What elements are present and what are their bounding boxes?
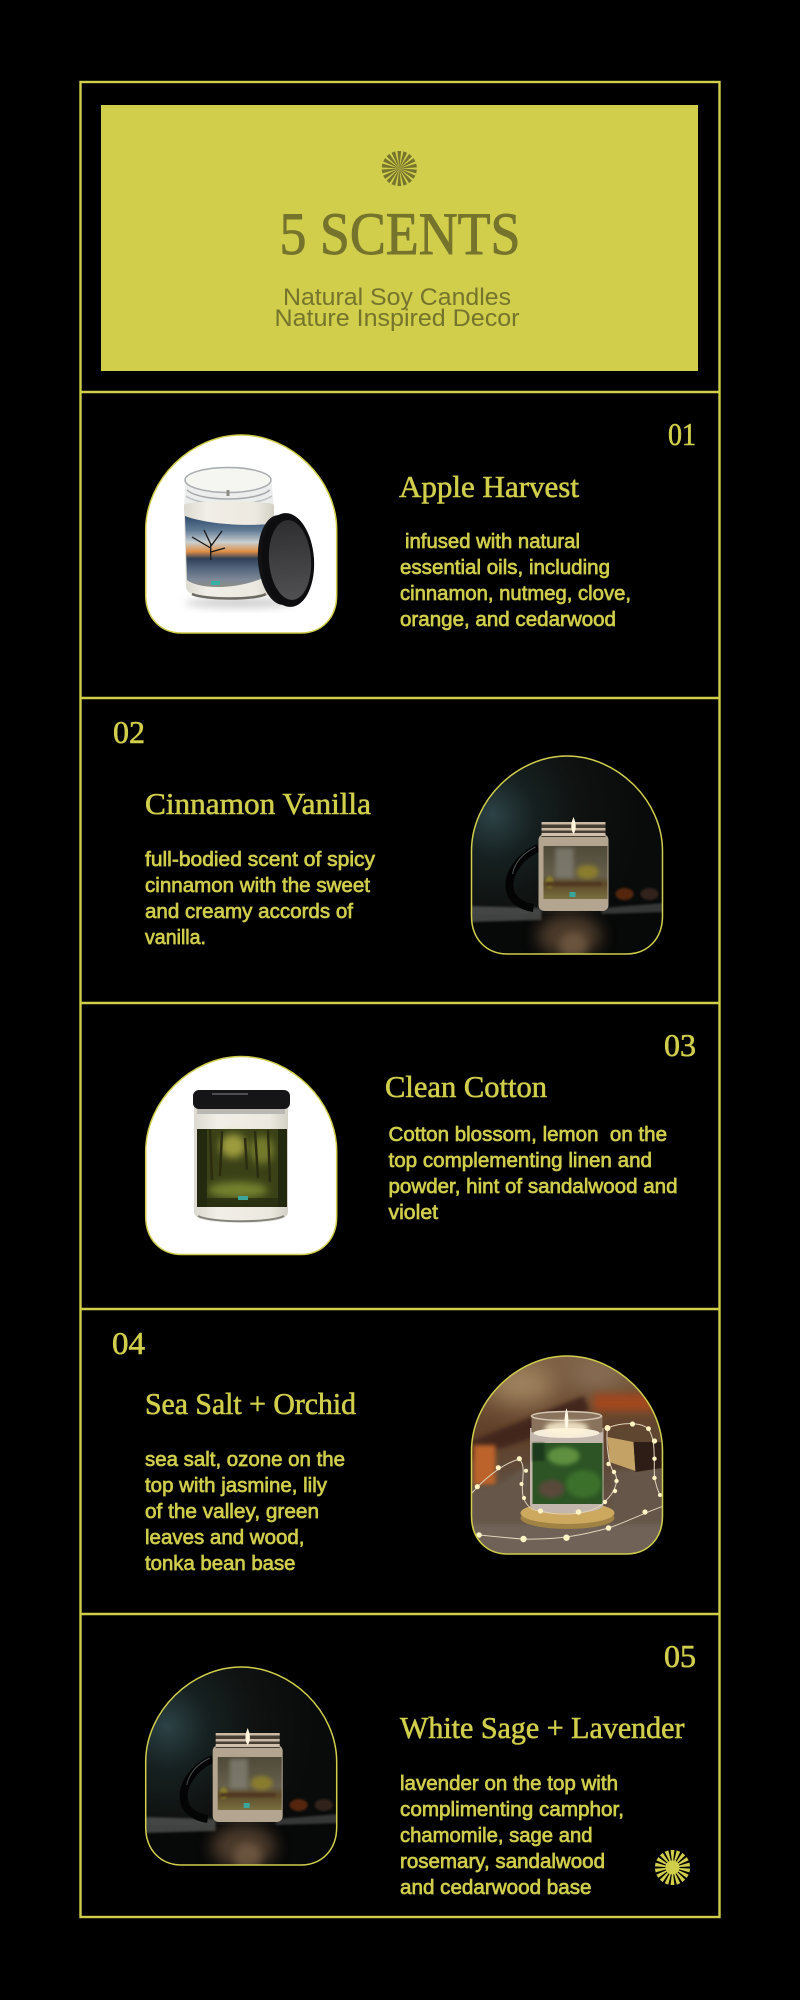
description: powder, hint of sandalwood and — [388, 1175, 678, 1198]
description: top with jasmine, lily — [145, 1474, 328, 1497]
panel: Clean Cotton — [146, 1027, 696, 1254]
photo: lit candle in dark room — [144, 1665, 340, 1871]
description: cinnamon, nutmeg, clove, — [400, 582, 631, 605]
description: top complementing linen and — [388, 1149, 652, 1172]
panel: Sea Salt + Orchid — [112, 1325, 666, 1575]
description: rosemary, sandalwood — [400, 1850, 605, 1873]
number: 01 — [668, 416, 696, 452]
photo: closed candle with forest label — [146, 1056, 337, 1254]
description: vanilla. — [145, 926, 206, 949]
outer frame — [80, 82, 720, 1917]
number: 02 — [113, 714, 145, 750]
icon: sunburst — [382, 151, 417, 186]
fairy lights — [470, 1421, 664, 1542]
description: cinnamon with the sweet — [145, 874, 370, 897]
description — [145, 848, 376, 949]
heading: Clean Cotton — [385, 1069, 547, 1104]
panel: header — [101, 105, 698, 371]
panel: White Sage + Lavender — [144, 1638, 696, 1899]
description: and cedarwood base — [400, 1876, 592, 1899]
panel: Apple Harvest — [146, 416, 696, 633]
subtitle: Natural Soy Candles — [283, 284, 511, 311]
description: and creamy accords of — [145, 900, 353, 923]
description: chamomile, sage and — [400, 1824, 592, 1847]
title: 5 SCENTS — [280, 201, 520, 267]
heading: Apple Harvest — [399, 469, 579, 504]
heading: White Sage + Lavender — [400, 1710, 685, 1745]
description: tonka bean base — [145, 1552, 296, 1575]
description: sea salt, ozone on the — [145, 1448, 345, 1471]
description — [388, 1123, 678, 1224]
heading: Sea Salt + Orchid — [145, 1386, 356, 1421]
number: 05 — [664, 1638, 696, 1674]
subtitle — [274, 284, 520, 332]
photo: candle with fairy lights — [470, 1354, 666, 1558]
description — [145, 1448, 345, 1575]
panel: Cinnamon Vanilla — [113, 714, 666, 960]
description: leaves and wood, — [145, 1526, 304, 1549]
description: complimenting camphor, — [400, 1798, 624, 1821]
description: Cotton blossom, lemon on the — [388, 1123, 667, 1146]
description: of the valley, green — [145, 1500, 319, 1523]
icon: sunburst — [655, 1850, 690, 1885]
description: lavender on the top with — [400, 1772, 618, 1795]
subtitle: Nature Inspired Decor — [274, 305, 520, 332]
description: full-bodied scent of spicy — [145, 848, 376, 871]
heading: Cinnamon Vanilla — [145, 786, 371, 821]
description — [400, 530, 631, 631]
description: essential oils, including — [400, 556, 610, 579]
description: orange, and cedarwood — [400, 608, 616, 631]
photo: lit candle in dark room — [470, 754, 666, 960]
description: infused with natural — [405, 530, 580, 553]
description: violet — [388, 1201, 438, 1224]
photo: candle with lid — [146, 435, 337, 633]
number: 04 — [112, 1325, 145, 1361]
description — [400, 1772, 624, 1899]
number: 03 — [664, 1027, 696, 1063]
